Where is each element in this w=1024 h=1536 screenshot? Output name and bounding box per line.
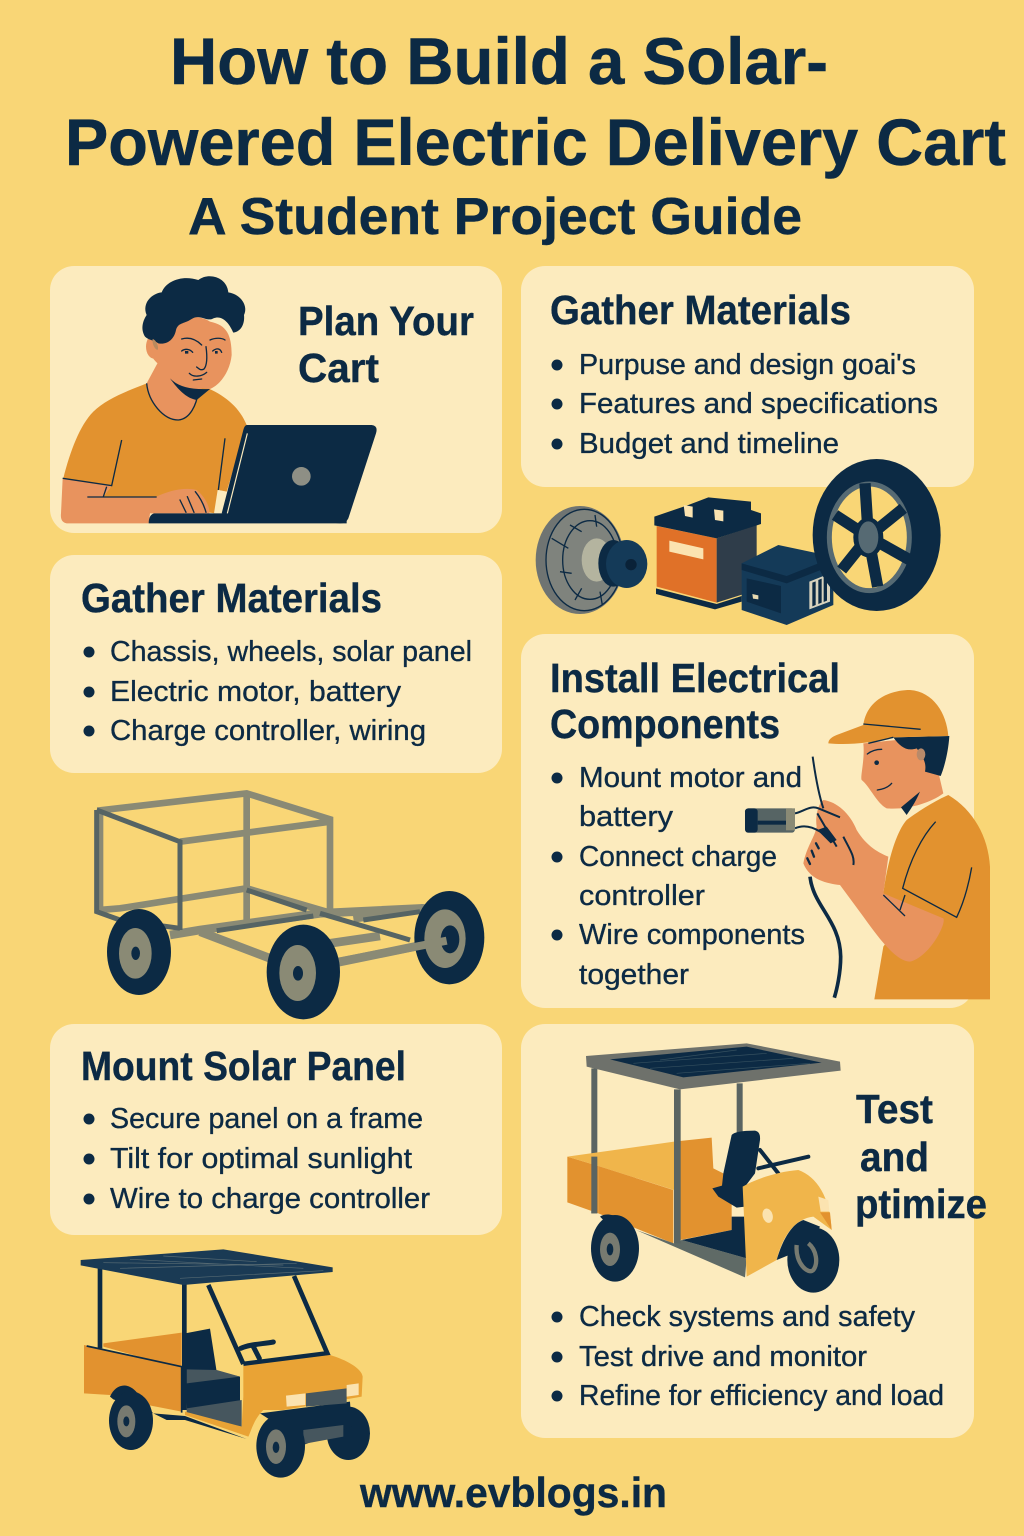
bullet list: Charge controller, wiring xyxy=(110,715,426,747)
bullet list: Electric motor, battery xyxy=(110,676,402,708)
bullet list xyxy=(84,636,472,747)
heading: install electrical components xyxy=(550,655,840,747)
illustration: motor, battery, controller and wheel xyxy=(536,459,941,625)
heading: gather materials: Gather Materials xyxy=(550,287,851,333)
heading: install electrical components: Install Electrical xyxy=(550,655,840,701)
bullet list: battery xyxy=(579,801,674,833)
bullet list: Budget and timeline xyxy=(579,428,839,460)
heading: test and optimize xyxy=(855,1086,987,1227)
illustration: cart chassis frame xyxy=(97,793,484,1019)
laptop xyxy=(149,425,377,523)
heading: test and optimize: Test xyxy=(856,1086,933,1132)
panel: gather materials (goals) xyxy=(521,266,974,487)
bullet list: Purpuse and design goai's xyxy=(579,349,916,381)
bullet list: Mount motor and xyxy=(579,762,802,794)
bullet list: Test drive and monitor xyxy=(579,1341,867,1373)
bullet list: together xyxy=(579,959,689,991)
solar roof xyxy=(586,1043,841,1089)
footer url: www.evblogs.in xyxy=(359,1469,667,1516)
bullet list xyxy=(552,762,805,991)
bullet list: Check systems and safety xyxy=(579,1301,915,1333)
icon: wheel xyxy=(813,459,941,611)
panel: gather materials (parts) xyxy=(50,555,502,773)
bullet list: Wire to charge controller xyxy=(110,1183,430,1215)
heading: gather materials: Gather Materials xyxy=(81,575,382,621)
title: Powered Electric Delivery Cart xyxy=(65,105,1006,179)
heading: plan your cart xyxy=(298,298,474,391)
panel: test and optimize xyxy=(521,1024,987,1438)
title: A Student Project Guide xyxy=(188,188,802,246)
illustration: solar golf cart xyxy=(81,1249,370,1478)
bullet list: Features and specifications xyxy=(579,388,938,420)
bullet list: controller xyxy=(579,880,705,912)
heading: test and optimize: ptimize xyxy=(855,1181,987,1227)
bullet list: Connect charge xyxy=(579,841,777,873)
bullet list: Wire components xyxy=(579,919,805,951)
bullet list: Tilt for optimal sunlight xyxy=(110,1143,412,1175)
bullet list: Secure panel on a frame xyxy=(110,1103,423,1135)
title xyxy=(65,24,1006,246)
illustration: student at laptop xyxy=(61,276,377,523)
heading: test and optimize: and xyxy=(860,1134,929,1180)
icon: motor xyxy=(536,506,647,614)
bullet list xyxy=(84,1103,430,1215)
heading: plan your cart: Cart xyxy=(298,345,379,391)
icon: battery xyxy=(654,497,761,609)
icon: charge controller xyxy=(742,545,833,625)
bullet list: Chassis, wheels, solar panel xyxy=(110,636,472,668)
icon: plug and wires xyxy=(745,757,854,998)
heading: plan your cart: Plan Your xyxy=(298,298,474,344)
illustration: cart with solar roof xyxy=(567,1043,841,1293)
heading: install electrical components: Components xyxy=(550,701,780,747)
bullet list: Refine for efficiency and load xyxy=(579,1380,944,1412)
panel: mount solar panel xyxy=(50,1024,502,1235)
panel: plan your cart xyxy=(50,266,502,533)
seat xyxy=(712,1131,808,1208)
heading: mount solar panel: Mount Solar Panel xyxy=(81,1043,406,1089)
icon: solar roof xyxy=(81,1249,333,1285)
bullet list xyxy=(552,1301,944,1412)
bullet list xyxy=(552,349,938,460)
panel: install electrical components xyxy=(521,634,974,1008)
illustration: technician wiring a plug xyxy=(745,690,990,999)
title: How to Build a Solar- xyxy=(170,24,828,98)
